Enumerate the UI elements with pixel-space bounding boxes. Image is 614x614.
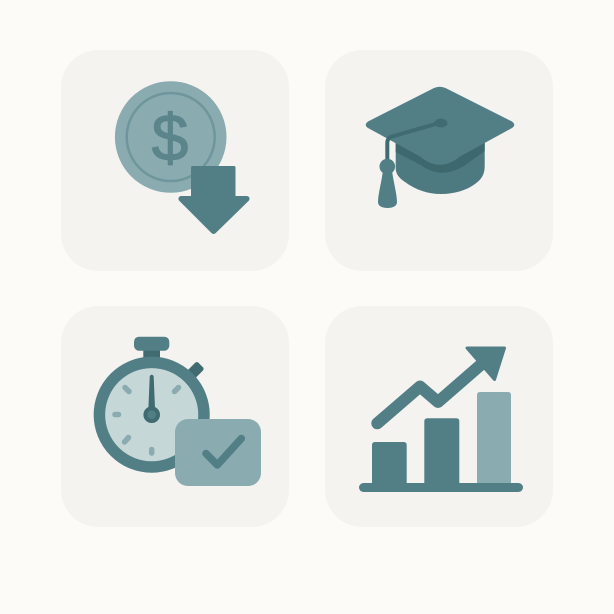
tassel cord: [387, 123, 439, 162]
clock hand: [148, 375, 155, 408]
icon: down arrow: [178, 166, 250, 234]
clock ticks: [115, 388, 178, 453]
icon: bar chart: [359, 392, 523, 492]
panel: time saved: [61, 306, 289, 527]
icon: graduation cap: [366, 87, 514, 208]
bar 1: [372, 442, 407, 486]
bar 3: [477, 392, 511, 486]
baseline: [359, 483, 523, 492]
panel: growth: [325, 306, 553, 527]
panel: graduation: [325, 50, 553, 271]
panel: falling cost: [61, 50, 289, 271]
icon: stopwatch: [99, 337, 205, 467]
icon: dollar coin: [115, 81, 226, 193]
icon: rising arrow: [377, 348, 504, 423]
bar 2: [424, 418, 459, 486]
icon: dollar coin: $: [152, 100, 188, 174]
icon: check badge: [175, 419, 261, 486]
tassel: [378, 159, 397, 208]
cord button: [434, 118, 448, 128]
